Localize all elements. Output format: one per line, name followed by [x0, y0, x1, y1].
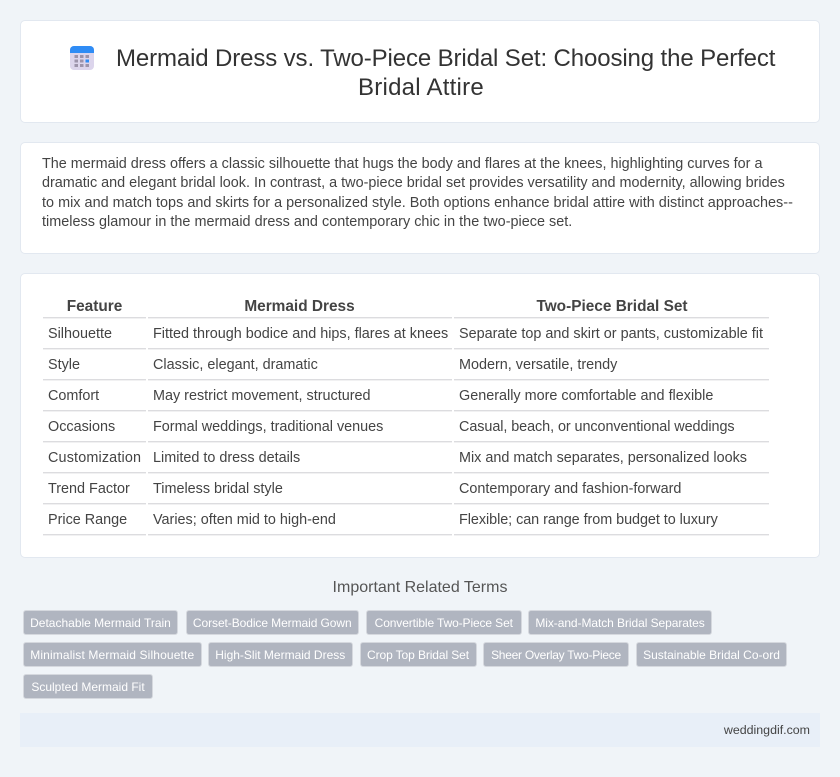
- comparison table: Classic, elegant, dramatic: [153, 357, 318, 373]
- comparison table: Occasions: [48, 419, 115, 435]
- title: Mermaid Dress vs. Two-Piece Bridal Set: Choosing the Perfect: [116, 45, 775, 72]
- comparison table: Casual, beach, or unconventional weddings: [459, 419, 735, 435]
- related terms tags: Sculpted Mermaid Fit: [31, 680, 145, 694]
- comparison table: Trend Factor: [48, 481, 130, 497]
- comparison table: Timeless bridal style: [153, 481, 283, 497]
- comparison table: Comfort: [48, 388, 99, 404]
- comparison table: Limited to dress details: [153, 450, 300, 466]
- comparison table: Customization: [48, 450, 141, 466]
- related terms tags: Sustainable Bridal Co-ord: [643, 648, 780, 662]
- intro text: The mermaid dress offers a classic silhouette that hugs the body and flares at the knees, highlighting curves for a: [42, 156, 762, 172]
- comparison table: Mermaid Dress: [244, 298, 355, 315]
- comparison table: Generally more comfortable and flexible: [459, 388, 713, 404]
- comparison table: Formal weddings, traditional venues: [153, 419, 383, 435]
- related terms tags: Mix-and-Match Bridal Separates: [535, 616, 705, 630]
- panel: comparison table: [20, 273, 820, 558]
- comparison table: [43, 298, 769, 536]
- comparison table: Contemporary and fashion-forward: [459, 481, 681, 497]
- related terms tags: Crop Top Bridal Set: [367, 648, 469, 662]
- comparison table: Feature: [67, 298, 122, 315]
- comparison table: Flexible; can range from budget to luxury: [459, 512, 718, 528]
- intro text: to mix and match tops and skirts for a personalized style. Both options enhance bridal attire with distinct approaches--: [42, 195, 793, 211]
- comparison table: Fitted through bodice and hips, flares at knees: [153, 326, 448, 342]
- title: Bridal Attire: [358, 74, 484, 101]
- related terms tags: Sheer Overlay Two-Piece: [491, 648, 621, 662]
- comparison table: Price Range: [48, 512, 127, 528]
- intro text: dramatic and elegant bridal look. In contrast, a two-piece bridal set provides versatility and modernity, allowing brides: [42, 175, 785, 191]
- footer bar: [20, 713, 820, 747]
- comparison table: May restrict movement, structured: [153, 388, 371, 404]
- comparison table: Mix and match separates, personalized looks: [459, 450, 747, 466]
- comparison table: Modern, versatile, trendy: [459, 357, 617, 373]
- related terms heading: Important Related Terms: [333, 579, 507, 596]
- comparison table: Separate top and skirt or pants, customizable fit: [459, 326, 763, 342]
- related terms tags: Detachable Mermaid Train: [30, 616, 171, 630]
- comparison table: Varies; often mid to high-end: [153, 512, 336, 528]
- related terms tags: Corset-Bodice Mermaid Gown: [193, 616, 352, 630]
- comparison table: Two-Piece Bridal Set: [536, 298, 688, 315]
- related terms tags: Convertible Two-Piece Set: [375, 616, 513, 630]
- comparison table: Style: [48, 357, 80, 373]
- related terms tags: [23, 610, 787, 699]
- comparison table: Silhouette: [48, 326, 112, 342]
- footer source: weddingdif.com: [724, 723, 810, 737]
- icon: calendar: [70, 46, 94, 70]
- title: [116, 45, 776, 101]
- intro text: timeless glamour in the mermaid dress and contemporary chic in the two-piece set.: [42, 214, 572, 230]
- related terms tags: Minimalist Mermaid Silhouette: [30, 648, 194, 662]
- related terms tags: High-Slit Mermaid Dress: [215, 648, 345, 662]
- panel: intro: [20, 142, 820, 254]
- header panel: [20, 20, 820, 123]
- intro text: [42, 156, 793, 230]
